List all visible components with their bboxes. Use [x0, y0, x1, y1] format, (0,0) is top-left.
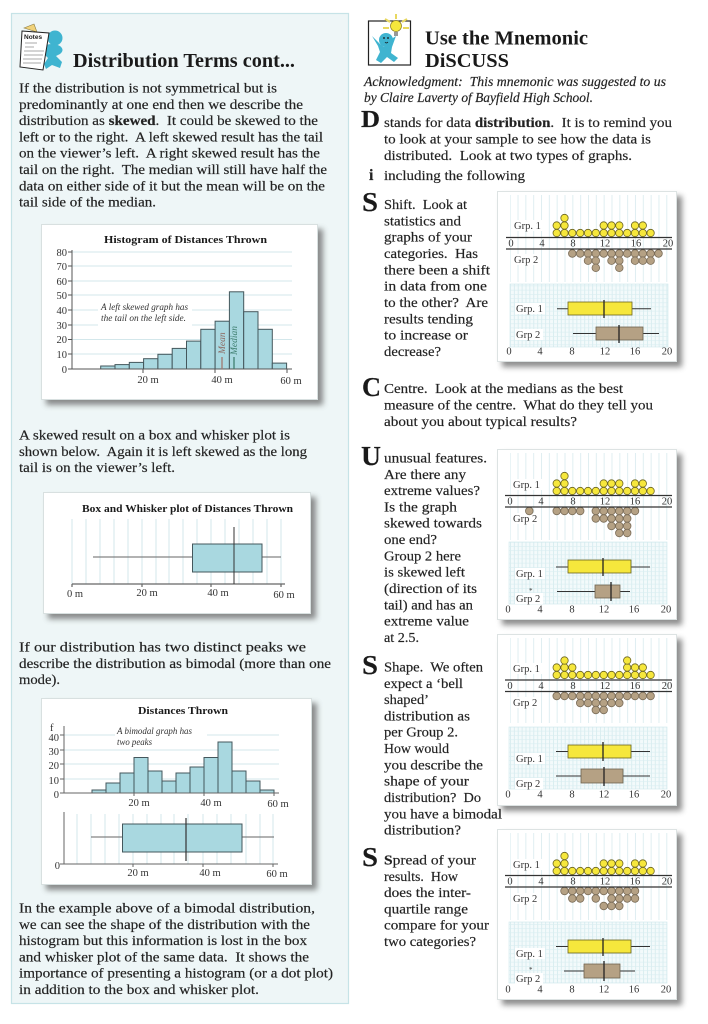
number lines	[505, 496, 672, 507]
section: S shape: expect a ‘bell	[384, 677, 463, 692]
section: U unusual features: Are there any	[384, 468, 466, 483]
dot plot group 1	[553, 852, 654, 875]
text block: acknowledgment	[363, 75, 667, 106]
section: S shape: distribution as	[384, 709, 470, 724]
icon: notes with blue figure: Notes	[24, 34, 42, 41]
heading: use the mnemonic discuss: DiSCUSS	[425, 50, 509, 72]
box plot labels: 12	[599, 984, 609, 996]
axis labels: 0	[54, 790, 59, 801]
dot plot group 1	[553, 214, 654, 237]
histogram bars	[101, 292, 287, 369]
chart: shift dot plots and box plots	[498, 192, 682, 367]
box plot labels: 20	[661, 604, 671, 616]
box plot group 2	[557, 582, 630, 601]
box plot labels: Grp 2	[516, 330, 540, 341]
text block: skewed definition: predominantly at one end then we describe the	[19, 98, 303, 113]
box plot group 2	[573, 325, 659, 343]
annotation: left skew: the tail on the left side.	[101, 313, 186, 324]
labels: 16	[630, 876, 640, 888]
annotation: left skew	[100, 302, 188, 324]
text block: skewed definition	[19, 82, 327, 211]
text block: bimodal definition: mode).	[19, 673, 60, 688]
box plot group 1	[556, 742, 650, 761]
box plot labels	[505, 949, 671, 996]
marker: mean	[218, 332, 228, 369]
axis labels	[67, 588, 295, 601]
axis labels: 20	[56, 335, 67, 346]
section: S shape: per Group 2.	[384, 726, 458, 741]
heading: distribution terms: Distribution Terms cont...	[73, 50, 295, 72]
labels: 4	[538, 496, 544, 508]
section: D data distribution	[361, 107, 672, 164]
box plot labels: Grp 2	[516, 594, 540, 605]
box plot labels: Grp 2	[516, 974, 540, 985]
text block: skewed definition: If the distribution is not symmetrical but is	[19, 82, 277, 96]
axis labels: 30	[56, 321, 67, 332]
section: S spread: results. How	[384, 870, 459, 885]
marker: mean: Mean	[218, 332, 228, 355]
section: S shift: Shift. Look at	[384, 198, 467, 213]
labels: 0	[507, 876, 513, 888]
text block: skewed definition: tail on the right. The median will still have half the	[19, 163, 327, 178]
labels: 20	[662, 496, 672, 508]
section: U unusual features: Is the graph	[384, 500, 457, 515]
labels: Grp 2	[514, 255, 538, 266]
section: S shift: graphs of your	[384, 231, 472, 246]
labels: 16	[630, 496, 640, 508]
text block: histogram importance: importance of presenting a histogram (or a dot plot)	[19, 967, 333, 982]
section: S shift: statistics and	[384, 214, 461, 229]
box plot labels: 4	[537, 790, 543, 800]
section: U unusual features	[361, 441, 487, 646]
box plot axis labels: 40 m	[199, 868, 221, 879]
number lines	[505, 876, 672, 887]
section: U unusual features: is skewed left	[384, 566, 465, 581]
box plot labels: 0	[505, 984, 511, 996]
section: S spread: quartile range	[384, 902, 468, 917]
axis labels: 60 m	[273, 590, 295, 601]
section: S shift: categories. Has	[384, 247, 478, 262]
text block: histogram importance: In the example above of a bimodal distribution,	[19, 902, 315, 916]
axis labels: 70	[56, 262, 67, 273]
labels: 20	[662, 876, 672, 888]
box plot group 2	[556, 767, 650, 786]
text block: skewed definition: data on either side of it but the mean will be on the	[19, 179, 325, 194]
box plot labels	[505, 754, 671, 800]
labels: 12	[600, 238, 610, 250]
annotation: bimodal: A bimodal graph has	[116, 727, 192, 737]
box plot group 1	[556, 558, 650, 576]
annotation: bimodal: two peaks	[117, 738, 152, 748]
text block: bimodal definition: If our distribution has two distinct peaks we	[19, 640, 306, 656]
section: C centre: C	[362, 372, 381, 402]
box plot labels: 0	[506, 346, 512, 358]
section: S shift: in data from one	[384, 280, 487, 295]
box plot labels: *	[529, 587, 533, 595]
box plot labels: 20	[662, 346, 672, 358]
marker: median: Median	[230, 326, 240, 356]
labels: Grp 2	[513, 514, 537, 525]
dot plot group 2	[561, 887, 639, 910]
labels: Grp. 1	[514, 221, 541, 232]
axis labels: 40	[56, 306, 67, 317]
box plot labels: 12	[599, 790, 609, 800]
text block: skewed box plot intro: shown below. Again it is left skewed as the long	[19, 445, 307, 460]
section: U unusual features: extreme value	[384, 615, 469, 630]
box plot labels: Grp. 1	[516, 569, 543, 580]
section: C centre	[362, 372, 653, 430]
section: S shift: there been a shift	[384, 263, 490, 278]
chart title: Histogram of Distances Thrown	[104, 234, 267, 246]
chart: histogram of distances thrown	[42, 224, 323, 405]
heading: use the mnemonic discuss: Use the Mnemonic	[425, 28, 588, 50]
axis labels: 10	[48, 776, 59, 787]
box plot	[93, 527, 281, 584]
section: S shift: S	[362, 187, 378, 217]
box plot axis labels: 0	[55, 861, 60, 872]
axis labels: 60 m	[267, 799, 289, 810]
section: S shape	[362, 650, 502, 839]
axis labels: 60 m	[280, 376, 302, 387]
box plot axis labels: 20 m	[127, 868, 149, 879]
section: S shape: you have a bimodal	[384, 807, 502, 822]
section: S spread: S	[362, 842, 378, 872]
section: S shape: distribution? Do	[384, 791, 481, 806]
text block: bimodal definition: describe the distribution as bimodal (more than one	[19, 657, 331, 672]
box plot labels: 20	[661, 984, 671, 996]
box plot labels: Grp. 1	[516, 754, 543, 765]
section: U unusual features: one end?	[384, 533, 437, 548]
box plot labels: 0	[505, 604, 511, 616]
box plot labels: 16	[629, 604, 639, 616]
section: C centre: about you about typical results?	[384, 415, 577, 430]
axis labels: 60	[56, 277, 67, 288]
section: C centre: measure of the centre. What do they tell you	[384, 398, 653, 414]
number lines	[505, 680, 672, 692]
axis labels	[48, 723, 289, 810]
labels: Grp. 1	[513, 860, 540, 871]
labels: 16	[631, 238, 641, 250]
axis labels: 40	[48, 733, 59, 744]
section: U unusual features: at 2.5.	[384, 631, 419, 646]
labels: 12	[600, 681, 610, 692]
dot plot group 2	[553, 692, 654, 714]
box plot axis labels: 60 m	[266, 869, 288, 880]
box plot group 1	[557, 300, 651, 318]
labels: 16	[630, 681, 640, 692]
section: S spread: Spread of your	[384, 854, 476, 868]
labels: 20	[662, 681, 672, 692]
axis labels: 20 m	[128, 798, 150, 809]
annotation: bimodal	[116, 727, 192, 748]
text block: skewed definition: on the viewer’s left. A right skewed result has the	[19, 147, 320, 162]
axis	[72, 584, 285, 587]
labels: 4	[538, 876, 544, 888]
axis labels: 50	[56, 291, 67, 302]
section: S spread	[362, 842, 489, 950]
axis labels: 40 m	[200, 798, 222, 809]
box plot labels: 4	[537, 346, 543, 358]
chart title: Box and Whisker plot of Distances Thrown	[82, 503, 293, 515]
axis labels: 0	[62, 365, 67, 376]
box plot labels: 4	[537, 604, 543, 616]
section: D data distribution: distributed. Look at two types of graphs.	[384, 149, 632, 164]
section: S shift: results tending	[384, 312, 473, 327]
text block: acknowledgment: Acknowledgment: This mnemonic was suggested to us	[363, 75, 667, 90]
axis labels	[56, 248, 302, 387]
section: S spread: compare for your	[384, 919, 489, 934]
section: S shape: you describe the	[384, 758, 483, 773]
section: S shape: shaped’	[384, 693, 429, 708]
labels: Grp. 1	[513, 480, 540, 491]
labels	[508, 221, 673, 266]
labels: 8	[570, 876, 576, 888]
labels	[507, 480, 672, 525]
labels: 8	[570, 681, 576, 692]
section: i including: including the following	[384, 169, 525, 184]
labels: 12	[600, 876, 610, 888]
labels: Grp. 1	[513, 664, 540, 675]
dot plot group 2	[526, 507, 639, 537]
labels: 0	[507, 681, 513, 692]
number lines	[506, 238, 672, 249]
section: U unusual features: (direction of its	[384, 582, 477, 597]
chart title: Distances Thrown	[138, 705, 228, 717]
section: S shift: to increase or	[384, 329, 468, 344]
box plot group 1	[556, 938, 650, 956]
labels: 4	[539, 238, 545, 250]
box plot labels: 8	[569, 790, 575, 800]
axis labels: 80	[56, 248, 67, 259]
text block: histogram importance: in addition to the box and whisker plot.	[19, 983, 259, 998]
section: S shape: distribution?	[384, 824, 461, 839]
box plot labels	[505, 569, 671, 616]
text block: histogram importance: and whisker plot of the same data. It shows the	[19, 950, 309, 965]
box plot	[91, 818, 274, 861]
labels: 12	[600, 496, 610, 508]
labels: 20	[663, 238, 673, 250]
text block: skewed definition: left or to the right. A left skewed result has the tail	[19, 130, 323, 145]
chart: bimodal distances thrown	[42, 698, 317, 890]
axis labels: 30	[48, 747, 59, 758]
chart: spread dot plots and box plots	[498, 830, 682, 1005]
section: S spread: two categories?	[384, 935, 476, 950]
box plot labels: 8	[569, 604, 575, 616]
section: S spread: does the inter-	[384, 886, 471, 901]
panel: distribution terms	[12, 14, 348, 1004]
axis labels: 10	[56, 350, 67, 361]
dot plot group 1	[553, 472, 654, 495]
section: S shift: decrease?	[384, 345, 441, 360]
dot plot group 2	[568, 250, 662, 272]
icon: figure with light bulb	[368, 14, 410, 65]
box plot labels: Grp 2	[516, 779, 540, 790]
box plot group 2	[564, 961, 635, 981]
labels: Grp 2	[513, 698, 537, 709]
axes	[60, 726, 279, 796]
labels	[507, 860, 672, 905]
box plot axis labels	[55, 861, 288, 880]
box plot labels: Grp. 1	[516, 304, 543, 315]
section: U unusual features: extreme values?	[384, 484, 480, 499]
section: C centre: Centre. Look at the medians as the best	[384, 382, 623, 397]
box plot labels: 16	[629, 790, 639, 800]
section: U unusual features: unusual features.	[384, 452, 487, 466]
heading: use the mnemonic discuss	[425, 28, 588, 72]
section: D data distribution: D	[361, 107, 380, 133]
box plot labels: 8	[569, 984, 575, 996]
section: U unusual features: tail) and has an	[384, 598, 473, 613]
text block: skewed definition: tail side of the median.	[19, 196, 156, 211]
box plot labels: 16	[630, 346, 640, 358]
box plot labels: 12	[599, 604, 609, 616]
box plot labels: Grp. 1	[516, 949, 543, 960]
section: D data distribution: stands for data distribution . It is to remind you	[384, 116, 672, 131]
text block: histogram importance	[19, 902, 333, 998]
box plot labels: 8	[569, 346, 575, 358]
axis labels: 20 m	[137, 375, 159, 386]
section: S shape: How would	[384, 742, 449, 757]
text block: skewed box plot intro	[19, 428, 307, 476]
annotation: left skew: A left skewed graph has	[100, 302, 188, 313]
chart: box and whisker plot of distances thrown	[44, 492, 316, 619]
box plot labels	[506, 304, 672, 358]
text block: skewed definition: distribution as skewed. It could be skewed to the	[19, 114, 318, 129]
axis labels: f	[50, 723, 54, 734]
labels: 8	[570, 496, 576, 508]
chart: unusual features dot plots and box plots	[498, 450, 682, 625]
axis labels: 0 m	[67, 589, 83, 600]
histogram bars	[92, 742, 274, 793]
dot plot group 1	[553, 657, 654, 679]
section: U unusual features: U	[361, 441, 381, 471]
labels: Grp 2	[513, 894, 537, 905]
icon: notes with blue figure	[20, 24, 62, 70]
marker: median	[230, 326, 240, 369]
text block: skewed box plot intro: A skewed result on a box and whisker plot is	[19, 428, 290, 444]
section: S shape: Shape. We often	[384, 660, 483, 676]
labels: 4	[538, 681, 544, 692]
text block: histogram importance: histogram but this information is lost in the box	[19, 934, 307, 949]
section: S shift: to the other? Are	[384, 296, 488, 311]
axis labels: 40 m	[207, 588, 229, 599]
box plot labels: 20	[661, 790, 671, 800]
text block: histogram importance: we can see the shape of the distribution with the	[19, 918, 310, 933]
section: S shape: S	[362, 650, 378, 680]
axis labels: 40 m	[211, 375, 233, 386]
box plot labels: 16	[629, 984, 639, 996]
section: D data distribution: to look at your sample to see how the data is	[384, 132, 651, 148]
text block: skewed box plot intro: tail is on the viewer’s left.	[19, 461, 175, 476]
labels	[507, 664, 672, 709]
section: S shift	[362, 187, 490, 360]
axes	[68, 250, 292, 373]
text block: acknowledgment: by Claire Laverty of Bayfield High School.	[364, 91, 593, 106]
box plot labels: 12	[600, 346, 610, 358]
section: U unusual features: Group 2 here	[384, 549, 461, 564]
labels: 0	[508, 238, 514, 250]
axis labels: 20 m	[136, 588, 158, 599]
box plot labels: 0	[505, 790, 511, 800]
labels: 0	[507, 496, 513, 508]
section: U unusual features: skewed towards	[384, 517, 482, 532]
section: i including: i	[369, 167, 374, 184]
chart: shape dot plots and box plots	[498, 634, 682, 811]
box plot labels: 4	[537, 984, 543, 996]
box plot axes	[60, 812, 278, 867]
box plot labels: *	[529, 966, 533, 974]
labels: 8	[570, 238, 576, 250]
section: S shape: shape of your	[384, 775, 469, 790]
text block: bimodal definition	[19, 640, 331, 688]
axis labels: 20	[48, 761, 59, 772]
